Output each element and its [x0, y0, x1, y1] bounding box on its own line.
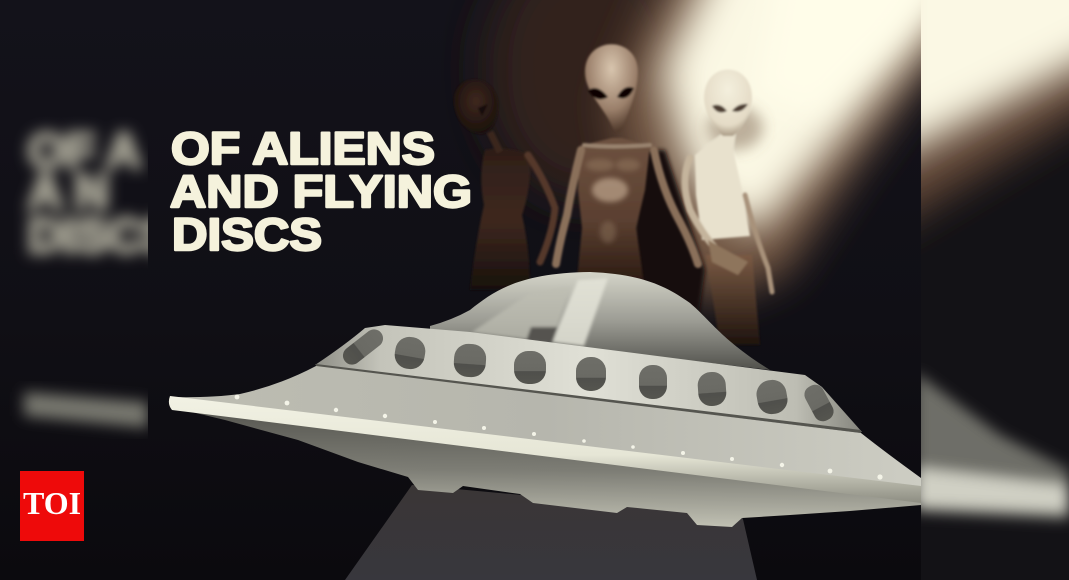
right alien head: [704, 70, 752, 136]
alien: right: [685, 70, 772, 345]
alien: left, in shadow: [454, 79, 555, 290]
right alien hand: [708, 240, 748, 275]
cabin divider line: [316, 364, 861, 433]
alien: centre: [556, 44, 698, 290]
blurred title echo: DISCS: [28, 210, 175, 263]
centre alien head: [585, 44, 638, 132]
centre alien torso: [576, 138, 650, 290]
saucer windows: [339, 326, 837, 424]
centre alien chest highlights: [586, 159, 640, 243]
title: DISCS: [172, 209, 322, 260]
right alien arms: [680, 156, 718, 246]
saucer rim highlight: [169, 396, 921, 503]
TOI logo: [20, 471, 84, 541]
right alien halo shadow: [707, 106, 763, 150]
light beam below saucer: [345, 485, 757, 580]
blurred left side panel: [24, 125, 175, 428]
saucer cabin band: [315, 325, 862, 432]
blurred light beam echo: [921, 0, 1069, 236]
blurred title echo: A N: [28, 166, 109, 219]
saucer dome: [430, 272, 770, 370]
blurred saucer echo: [915, 372, 1069, 520]
blurred right side panel: [921, 0, 1069, 534]
main illustration: [168, 0, 921, 580]
title: [170, 123, 472, 260]
light beam behind aliens: [474, 0, 921, 324]
flying saucer: [169, 272, 921, 527]
saucer upper hull: [170, 366, 921, 490]
title: AND FLYING: [170, 166, 472, 217]
hull rivets: [235, 395, 883, 480]
blurred title echo: OF A: [28, 125, 141, 178]
centre alien arms: [556, 150, 581, 264]
right alien legs: [706, 255, 760, 345]
TOI logo: TOI: [23, 485, 81, 521]
blurred saucer rim echo: [24, 392, 148, 428]
blurred title echo: [28, 125, 175, 263]
right alien torso: [695, 132, 750, 240]
dome light streaks: [472, 278, 608, 346]
saucer underside with landing pods: [175, 408, 921, 527]
title: OF ALIENS: [171, 123, 435, 174]
